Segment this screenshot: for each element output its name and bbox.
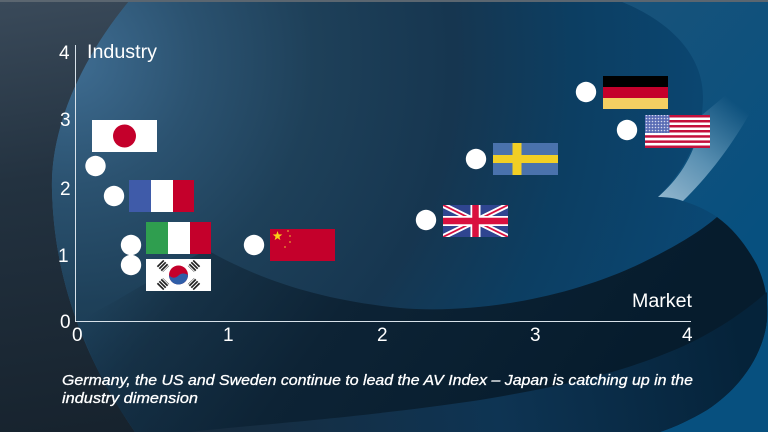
- data point: Germany: [576, 82, 596, 102]
- flag: China: [270, 229, 335, 261]
- y axis title: Industry: [87, 42, 158, 63]
- flag: Germany: [603, 76, 668, 109]
- y axis tick labels: 3: [60, 110, 71, 131]
- x axis title: Market: [632, 291, 693, 312]
- x axis tick labels: 1: [223, 325, 234, 346]
- data point: Italy: [121, 235, 141, 255]
- y axis tick labels: [58, 43, 71, 333]
- data point: China: [244, 235, 264, 255]
- flag: Italy: [146, 222, 211, 254]
- y axis tick labels: 0: [60, 312, 71, 333]
- y axis tick labels: 1: [58, 246, 69, 267]
- axes: [76, 45, 691, 322]
- x axis tick labels: 0: [72, 325, 83, 346]
- x axis tick labels: [72, 325, 693, 346]
- flag: UK: [443, 205, 508, 237]
- data point: USA: [617, 120, 637, 140]
- flag: USA: [645, 115, 710, 148]
- data point: UK: [416, 210, 436, 230]
- data point: Japan: [85, 156, 106, 176]
- data point: South Korea: [121, 255, 141, 275]
- flag: France: [129, 180, 194, 212]
- x axis tick labels: 2: [377, 325, 388, 346]
- data point: France: [104, 186, 124, 206]
- flag: Sweden: [493, 143, 558, 175]
- caption: Germany, the US and Sweden continue to lead the AV Index – Japan is catching up in the: [62, 372, 693, 389]
- flag: Japan: [92, 120, 157, 152]
- caption: [62, 372, 693, 407]
- y axis tick labels: 2: [60, 179, 71, 200]
- caption: industry dimension: [62, 390, 198, 407]
- data point: Sweden: [466, 149, 486, 169]
- x axis tick labels: 4: [682, 325, 693, 346]
- y axis tick labels: 4: [59, 43, 70, 64]
- x axis tick labels: 3: [530, 325, 541, 346]
- flag: South Korea: [146, 259, 211, 291]
